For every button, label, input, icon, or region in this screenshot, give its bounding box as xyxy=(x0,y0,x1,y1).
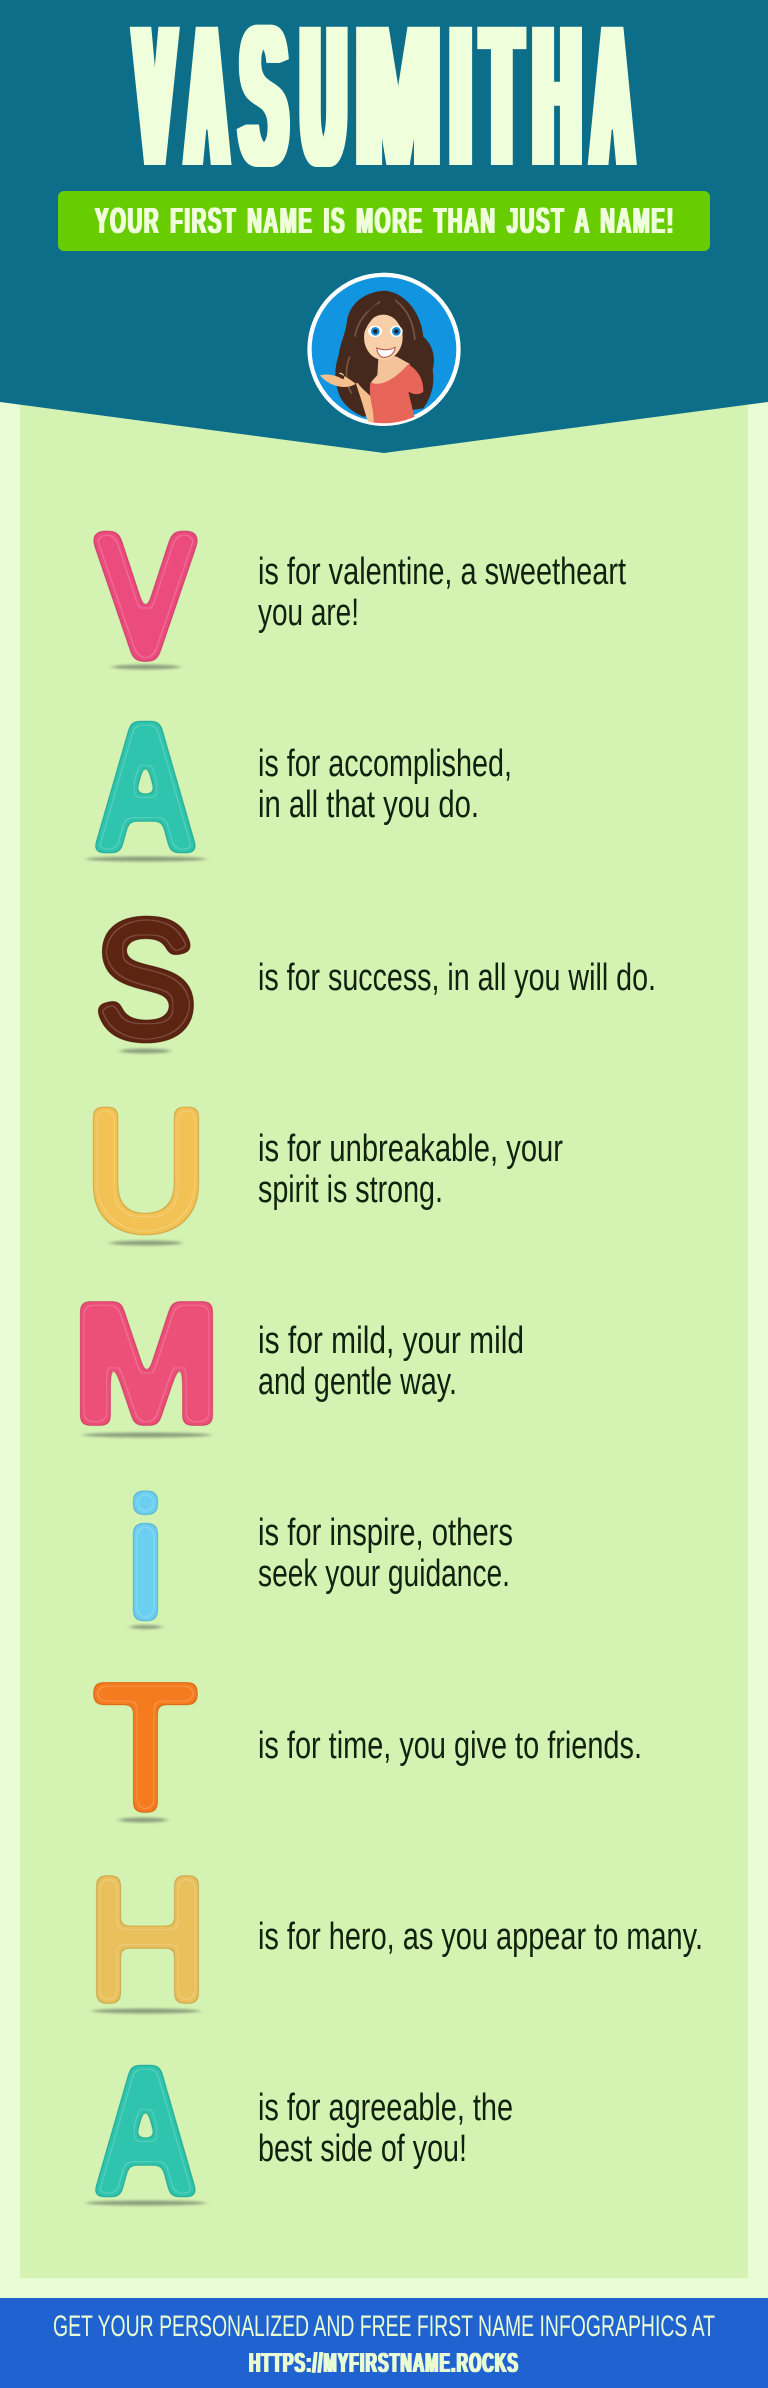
text: i line xyxy=(258,1512,513,1595)
row: U xyxy=(84,1075,563,1266)
footer url: HTTPS://MYFIRSTNAME.ROCKS xyxy=(249,2347,519,2378)
letter A: A xyxy=(94,687,197,888)
portrait: cartoon woman in circle xyxy=(307,273,461,426)
text: V line: is for valentine, a sweetheart xyxy=(258,551,626,593)
letter U: U xyxy=(84,1075,208,1266)
letter S: S xyxy=(96,888,196,1071)
row: T xyxy=(94,1650,642,1846)
text: T line: is for time, you give to friends. xyxy=(258,1725,642,1767)
text: M line xyxy=(258,1320,524,1403)
text: second A line xyxy=(258,2087,513,2170)
letter V: V xyxy=(100,504,192,688)
row: i xyxy=(127,1467,513,1652)
text: A line xyxy=(258,743,512,826)
row: A xyxy=(86,687,512,888)
text: i line: is for inspire, others xyxy=(258,1512,513,1554)
footer band xyxy=(0,2298,768,2388)
text: M line: and gentle way. xyxy=(258,1361,457,1403)
letter M: M xyxy=(72,1269,221,1459)
row: H xyxy=(87,1842,703,2036)
tagline bar xyxy=(58,191,710,251)
text: A line: is for accomplished, xyxy=(258,743,512,785)
text: U line: spirit is strong. xyxy=(258,1169,443,1211)
text: V line: you are! xyxy=(258,592,359,634)
text: second A line: best side of you! xyxy=(258,2128,467,2170)
letter T: T xyxy=(94,1650,197,1846)
row: A (second) xyxy=(86,2031,513,2232)
text: A line: in all that you do. xyxy=(258,784,479,826)
row: M xyxy=(72,1269,524,1459)
text: second A line: is for agreeable, the xyxy=(258,2087,513,2129)
row: V xyxy=(100,504,626,688)
text: M line: is for mild, your mild xyxy=(258,1320,524,1362)
text: V line xyxy=(258,551,626,634)
row: S xyxy=(96,888,656,1071)
text: U line xyxy=(258,1128,563,1211)
content panel xyxy=(20,380,748,2278)
letter i: i xyxy=(127,1467,164,1652)
header banner xyxy=(0,0,768,453)
letter A second: A xyxy=(94,2031,197,2232)
letter H: H xyxy=(87,1842,208,2036)
text: U line: is for unbreakable, your xyxy=(258,1128,563,1170)
text: i line: seek your guidance. xyxy=(258,1553,510,1595)
